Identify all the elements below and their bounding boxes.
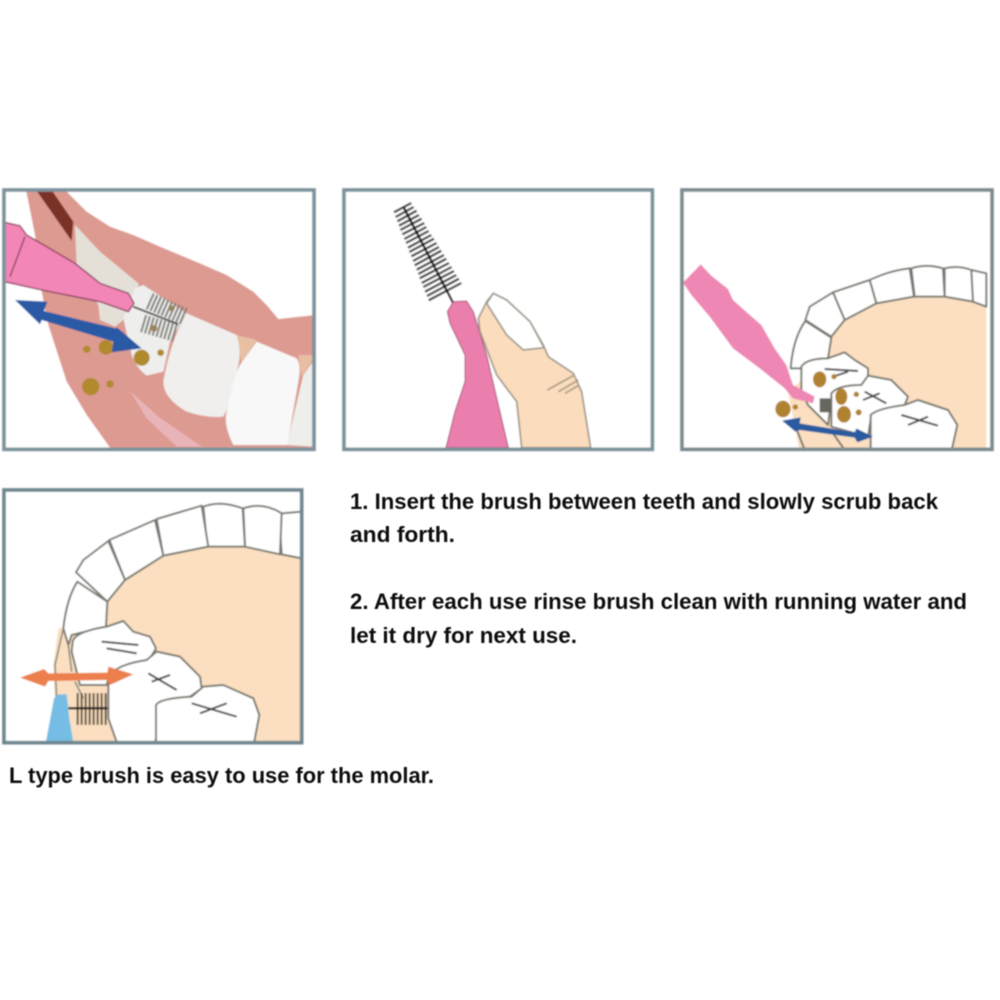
blue handle bbox=[45, 694, 74, 747]
panel: brushing front teeth bbox=[4, 190, 315, 450]
brush wire bbox=[67, 706, 108, 710]
panel: cleaning back teeth with pink brush bbox=[682, 190, 992, 452]
brush bristles bbox=[76, 692, 108, 726]
palate bbox=[788, 297, 986, 452]
knuckle wrinkles bbox=[547, 376, 579, 393]
blue double arrow bbox=[782, 417, 873, 442]
fingernail bbox=[487, 293, 544, 350]
frame bbox=[4, 490, 302, 743]
pink handle bbox=[446, 301, 508, 448]
panel: brush held between fingers bbox=[344, 190, 654, 450]
arch teeth bbox=[791, 266, 986, 368]
plaque spots bbox=[82, 305, 175, 395]
dark mouth shadow bbox=[36, 190, 73, 241]
tooth three bbox=[226, 342, 300, 445]
plaque spots bbox=[775, 371, 862, 423]
panel: L type brush on molar bbox=[4, 490, 302, 747]
instruction one: and forth. bbox=[350, 522, 455, 547]
molars bbox=[796, 352, 957, 452]
upper teeth bbox=[75, 225, 140, 327]
tooth grooves bbox=[825, 369, 938, 426]
pink handle bbox=[683, 264, 815, 403]
tooth grooves bbox=[102, 642, 237, 717]
arch teeth bbox=[63, 504, 302, 645]
gum triangles bbox=[237, 335, 315, 377]
orange double arrow bbox=[20, 667, 133, 687]
molars bbox=[72, 621, 259, 747]
lips and gums bbox=[26, 190, 315, 450]
gum outline bbox=[55, 628, 83, 698]
instruction two: 2. After each use rinse brush clean with running water and bbox=[350, 589, 967, 614]
brush bristles bbox=[394, 203, 461, 300]
brush head bbox=[820, 398, 831, 412]
brush wire bbox=[133, 307, 178, 324]
frame bbox=[682, 190, 992, 449]
blue double arrow bbox=[15, 300, 142, 352]
instruction one: 1. Insert the brush between teeth and slowly scrub back bbox=[350, 489, 939, 514]
instruction two bbox=[350, 589, 967, 648]
caption: L type brush: L type brush is easy to use for the molar. bbox=[9, 763, 434, 788]
gum highlight bbox=[130, 391, 202, 447]
instruction two: let it dry for next use. bbox=[350, 623, 577, 648]
tooth one bbox=[123, 285, 187, 376]
pink handle bbox=[4, 222, 134, 312]
tooth two bbox=[163, 313, 240, 417]
frame bbox=[344, 190, 652, 449]
brush bristles bbox=[149, 301, 185, 317]
instruction one bbox=[350, 489, 939, 547]
finger bbox=[478, 293, 591, 448]
tooth four bbox=[287, 362, 313, 448]
palate bbox=[53, 547, 302, 747]
frame bbox=[4, 190, 314, 449]
brush wire bbox=[403, 207, 453, 303]
